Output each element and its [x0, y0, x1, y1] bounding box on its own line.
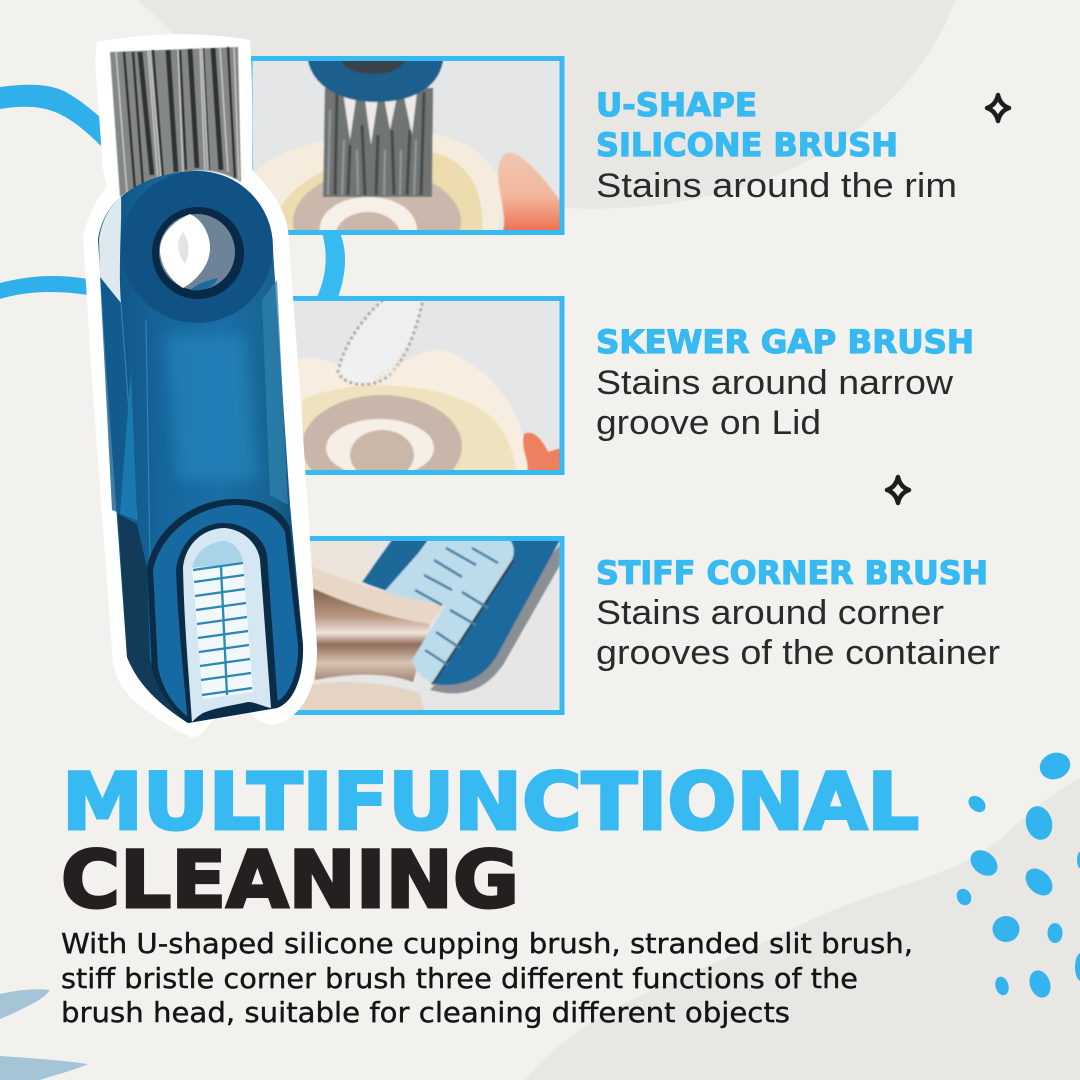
text: skewer gap brush — [596, 323, 974, 442]
body texture — [100, 277, 288, 560]
text: stiff corner brush: grooves of the container — [596, 634, 1000, 672]
text: stiff corner brush — [596, 554, 1000, 672]
icon: sparkle top — [987, 95, 1009, 121]
description text: brush head, suitable for cleaning different objects — [61, 997, 790, 1029]
sticker outline — [83, 34, 317, 737]
title — [61, 758, 919, 926]
silicone bristle block — [183, 528, 271, 722]
text: U-shape silicone brush: U-SHAPE — [596, 86, 757, 124]
photo: bottle — [300, 540, 445, 712]
title: MULTIFUNCTIONAL — [62, 758, 919, 848]
left band — [100, 277, 137, 520]
text: skewer gap brush: Stains around narrow — [596, 364, 953, 402]
decorative droplets — [954, 748, 1080, 1001]
text: stiff corner brush: STIFF CORNER BRUSH — [596, 554, 988, 592]
right band — [262, 280, 288, 505]
icon: sparkle middle — [887, 477, 909, 503]
photo: blue brush head — [362, 540, 560, 693]
text: U-shape silicone brush — [596, 86, 957, 205]
cap highlight — [99, 197, 121, 303]
seams — [121, 303, 150, 560]
photo: wire brush — [338, 300, 423, 385]
photo: finger — [498, 153, 565, 232]
ring — [121, 171, 273, 323]
body shell — [98, 171, 303, 723]
photo: brush head — [308, 60, 443, 102]
bristles — [110, 47, 241, 197]
lower translucent panel — [118, 514, 188, 723]
title: CLEANING — [61, 836, 519, 926]
panel: skewer gap brush photo — [292, 296, 564, 475]
text: skewer gap brush: groove on Lid — [596, 404, 821, 442]
photo: lid — [256, 132, 502, 230]
panel: stiff corner brush photo — [290, 538, 562, 712]
product: three-in-one brush — [83, 34, 317, 737]
decorative brush strokes bottom-left — [0, 989, 88, 1080]
photo: bristles — [323, 88, 433, 197]
text: U-shape silicone brush: SILICONE BRUSH — [596, 126, 898, 164]
photo: lid — [298, 350, 528, 470]
decorative blue arcs — [0, 85, 345, 299]
description text: stiff bristle corner brush three different functions of the — [61, 963, 858, 995]
photo: fingertip — [522, 432, 560, 470]
text: stiff corner brush: Stains around corner — [596, 594, 944, 632]
description text: With U-shaped silicone cupping brush, stranded slit brush, — [61, 928, 913, 960]
centre glow — [165, 335, 258, 480]
panel: U-shape silicone brush photo — [250, 56, 564, 235]
text: U-shape silicone brush: Stains around the rim — [596, 167, 957, 205]
description text — [61, 928, 913, 1029]
corner brush slot — [147, 499, 303, 723]
text: skewer gap brush: SKEWER GAP BRUSH — [596, 323, 974, 361]
